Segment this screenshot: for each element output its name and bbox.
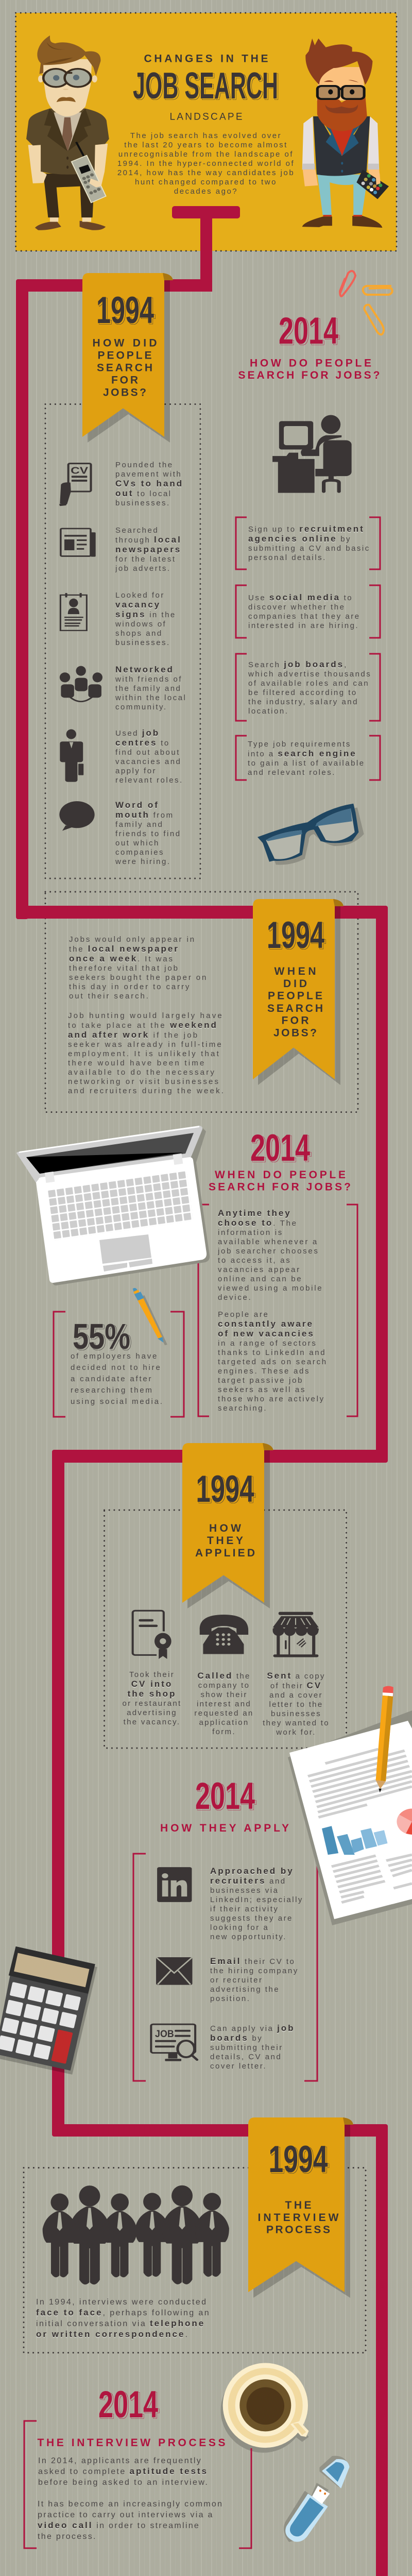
heading: the interview process: THE INTERVIEW PROCESS (37, 2437, 226, 2449)
text: sent a copy: work for. (276, 1728, 316, 1737)
ribbon: 1994 when did people search: FOR (281, 1015, 309, 1026)
ribbon: 1994 when did people search: SEARCH (267, 1003, 323, 1014)
text: job centres: find out about (115, 748, 180, 757)
text: approached by recruiters: if their activity (210, 1905, 279, 1913)
text: pounded the pavement: businesses. (115, 499, 170, 507)
text: video call: practice to carry out interviews via a (38, 2511, 214, 2519)
text: word of mouth: out which (115, 839, 160, 848)
text: networked: within the local (115, 693, 186, 702)
stat card: 55 percent: decided not to hire (71, 1363, 162, 1372)
panel: title header (15, 13, 397, 251)
text: face to face: face to face, perhaps following an (36, 2308, 210, 2317)
text: anytime they choose: viewed using a mobile (218, 1284, 323, 1293)
text: 1994 local newspaper (69, 935, 244, 1002)
icon: vacancy sign (60, 593, 87, 631)
text: 1994 weekend and after work (68, 1011, 246, 1097)
ribbon: 1994 when did people search (253, 899, 344, 1085)
text: called the company: interest and (197, 1700, 251, 1708)
text: anytime they choose: job searcher chooses (218, 1247, 319, 1256)
icon: job board monitor: JOB (155, 2028, 174, 2039)
card: search engine (236, 736, 380, 780)
year: 2014: 2014 (98, 2384, 158, 2426)
text: 1994 weekend and after work: and recruiters during the week. (68, 1087, 225, 1095)
text: video call: video call in order to streamline (38, 2520, 200, 2530)
text: pounded the pavement: pavement with (115, 470, 182, 479)
text: networked: community. (115, 703, 167, 711)
text: vacancy signs: shops and (115, 629, 163, 638)
text: anytime they choose: online and can be (218, 1275, 302, 1283)
text: constantly aware: engines. These ads (218, 1367, 310, 1376)
heading: how do people search for jobs: HOW DO PEOPLE (250, 358, 371, 369)
text: anytime they choose: choose to. The (218, 1218, 298, 1228)
text: called the company: show their (200, 1690, 248, 1699)
panel: 2014 interview process (24, 2384, 251, 2548)
text: 1994 local newspaper: once a week. It was (69, 954, 174, 963)
illustration: pencil (376, 1686, 393, 1792)
text: 1994 weekend and after work: seeker was already in full-time (68, 1040, 223, 1049)
text: word of mouth: companies (115, 848, 164, 857)
ribbon: 1994 how they applied: 1994 (196, 1468, 254, 1510)
stat card: 55 percent: researching them (71, 1386, 153, 1395)
dotted panel frames (24, 404, 386, 2576)
panel: 2014 how do people search: SEARCH FOR JOBS? (238, 369, 380, 381)
illustration: blue glasses (258, 804, 364, 865)
ribbon: 1994 when did people search: 1994 (267, 914, 324, 956)
text: aptitude tests (38, 2455, 249, 2489)
text: job centres: vacancies and (115, 757, 181, 766)
text: sent a copy: and a cover (269, 1691, 323, 1700)
text: 1994 local newspaper: therefore vital that job (69, 964, 179, 973)
text: approached by recruiters: new opportunity. (210, 1933, 287, 1941)
stat card: 55 percent (54, 1312, 184, 1417)
ribbon: 1994 when did people search: PEOPLE (268, 990, 322, 1002)
intro text: decades ago? (174, 187, 238, 196)
text: approached by recruiters: LinkedIn; especially (210, 1895, 303, 1904)
card: search engine: into a search engine (248, 749, 357, 758)
icon: businessman (60, 729, 83, 782)
year: 2014: 2014 (279, 310, 338, 352)
text: face to face (36, 2297, 247, 2342)
text: called the company: requested an (194, 1709, 254, 1718)
bracket frame (133, 1854, 317, 2081)
ribbon: 1994 when did people search: JOBS? (273, 1027, 317, 1039)
card: recruitment agencies (236, 517, 380, 569)
card: job boards (236, 654, 380, 721)
ribbon: 1994 when did people search: DID (283, 978, 307, 990)
illustration: 2014 bearded job seeker with smartphone (302, 39, 389, 228)
icon: shop front (273, 1612, 319, 1657)
year: 2014: 2014 (250, 1127, 310, 1169)
text: 1994 local newspaper: Jobs would only appear in (69, 935, 196, 944)
stat card: 55 percent: a candidate after (71, 1375, 152, 1383)
ribbon: 1994 how did people search: FOR (111, 374, 138, 386)
card: job boards: which advertise thousands (248, 670, 371, 679)
intro text: the last 20 years to become almost (124, 141, 288, 149)
icon: person at computer (272, 415, 352, 493)
ribbon: 1994 the interview process: THE (285, 2199, 311, 2211)
stat card: 55 percent: using social media. (71, 1397, 164, 1406)
text: email CV: position. (210, 1994, 250, 2003)
text: constantly aware: those who are actively (218, 1395, 325, 1403)
text: video call: It has become an increasingly common (38, 2500, 223, 2509)
text: word of mouth (115, 801, 200, 868)
text: job centres: apply for (115, 767, 157, 775)
illustration: calculator (0, 1946, 97, 2075)
panel: 1994 interview process items (36, 2185, 247, 2342)
text: job boards: boards by (210, 2033, 263, 2043)
panel: 1994 how did people search items (59, 461, 200, 868)
ribbon: 1994 the interview process: PROCESS (266, 2224, 330, 2236)
ribbon: 1994 how they applied: HOW (209, 1522, 241, 1534)
ribbon: 1994 how did people search: JOBS? (103, 386, 146, 398)
text: sent a copy: of their CV (270, 1681, 322, 1690)
ribbon: 1994 how did people search: HOW DID (93, 337, 157, 349)
text: aptitude tests: In 2014, applicants are frequently (38, 2456, 202, 2465)
text: word of mouth: were hiring. (115, 857, 171, 866)
text: vacancy signs: vacancy (115, 600, 161, 609)
text: job boards (210, 2024, 316, 2072)
text: called the company: application (199, 1718, 249, 1727)
text: email CV (210, 1957, 316, 2005)
text: anytime they choose: device. (218, 1293, 252, 1302)
icon: row of business people (43, 2185, 229, 2284)
text: vacancy signs (115, 591, 198, 649)
bracket frame (198, 1205, 357, 1416)
text: CV into the shop: the vacancy. (124, 1718, 180, 1726)
panel: 1994 how they applied items (111, 1611, 337, 1738)
decoration: paper clips (340, 271, 392, 334)
card: social media: discover whether the (248, 603, 345, 612)
text: 1994 local newspaper: the local newspaper (69, 944, 179, 954)
heading: when do people search for jobs: WHEN DO PEOPLE (215, 1169, 346, 1181)
text: called the company: company to (198, 1681, 250, 1690)
text: constantly aware: constantly aware (218, 1319, 314, 1329)
ribbon: 1994 how did people search: SEARCH (97, 362, 152, 374)
card: job boards: be filtered according to (248, 688, 357, 697)
text: constantly aware: of new vacancies (218, 1329, 315, 1338)
text: searched newspapers: newspapers (115, 545, 181, 554)
ribbon: 1994 the interview process: INTERVIEW (258, 2212, 339, 2224)
text: aptitude tests: asked to complete aptitude tests (38, 2466, 208, 2476)
text: sent a copy (255, 1671, 337, 1738)
card: job boards: of available roles and can (248, 679, 369, 688)
text: 1994 local newspaper: out their search. (69, 992, 150, 1001)
heading: how they apply: HOW THEY APPLY (160, 1822, 289, 1834)
text: searched newspapers: Searched (115, 526, 159, 535)
ribbon: 1994 when did people search: WHEN (274, 965, 316, 977)
text: anytime they choose: to access it, as (218, 1256, 291, 1265)
icon: CV in hand (59, 464, 91, 506)
text: email CV: the hiring company (210, 1967, 299, 1975)
icon: networking people (60, 666, 102, 702)
text: face to face: initial conversation via telephone (36, 2318, 205, 2328)
illustration: laptop (16, 1126, 210, 1285)
text: approached by recruiters (210, 1867, 316, 1943)
ribbon: 1994 how did people search (82, 273, 173, 443)
text: word of mouth: mouth from (115, 810, 174, 820)
text: sent a copy: businesses (271, 1709, 321, 1718)
text: word of mouth: family and (115, 820, 163, 829)
text: job centres: centres to (115, 738, 170, 748)
text: constantly aware: thanks to LinkedIn and (218, 1348, 326, 1357)
text: anytime they choose: information is (218, 1228, 283, 1237)
intro text: 1994. In the hyper-connected world of (117, 159, 295, 168)
ribbon: 1994 how did people search: PEOPLE (98, 349, 151, 361)
text: 1994 weekend and after work: employment. It is unlikely that (68, 1049, 220, 1058)
card: search engine: and relevant roles. (248, 768, 336, 777)
text: 1994 local newspaper: seekers bought the paper on (69, 973, 208, 982)
icon: speech bubble (59, 801, 95, 831)
card: recruitment agencies: submitting a CV and basic (248, 544, 370, 553)
text: constantly aware: People are (218, 1310, 269, 1319)
text: job centres (115, 728, 200, 786)
text: vacancy signs: businesses. (115, 638, 170, 647)
heading: Landscape: LANDSCAPE (170, 112, 242, 123)
text: 1994 weekend and after work: and after work if the job (68, 1030, 199, 1040)
text: constantly aware: searching. (218, 1404, 267, 1413)
heading: Job Search: JOB SEARCH (133, 65, 278, 107)
card: recruitment agencies: personal details. (248, 553, 327, 562)
panel: 2014 when do people search (198, 1127, 357, 1416)
text: job boards: cover letter. (210, 2062, 267, 2071)
icon: job board monitor (151, 2024, 197, 2061)
stat card: 55 percent: of employers have (71, 1352, 158, 1361)
text: approached by recruiters: businesses via (210, 1886, 279, 1895)
panel: 2014 how do people search (236, 310, 380, 780)
text: networked: with friends of (115, 675, 182, 684)
text: email CV: or recruiter (210, 1976, 263, 1985)
card: social media: companies that they are (248, 612, 360, 621)
text: aptitude tests: before being asked to an interview. (38, 2478, 209, 2487)
text: 1994 weekend and after work: available to do the necessary (68, 1068, 216, 1077)
intro text: 2014, how has the way candidates job (117, 168, 295, 177)
icon: LinkedIn (157, 1867, 192, 1902)
card: social media (236, 585, 380, 638)
illustration: document with charts and pencil (288, 1686, 412, 1925)
text: video call: the process. (38, 2532, 97, 2541)
text: sent a copy: letter to the (269, 1700, 323, 1709)
text: anytime they choose (218, 1209, 354, 1303)
illustration: pen (133, 1288, 166, 1345)
text: pounded the pavement: Pounded the (115, 461, 174, 469)
text: vacancy signs: signs in the (115, 609, 176, 619)
text: CV into the shop: CV into (131, 1679, 173, 1689)
text: CV into the shop: the shop (128, 1689, 176, 1699)
ribbon: 1994 how did people search: 1994 (96, 290, 154, 331)
bracket frame (24, 2421, 251, 2548)
text: constantly aware: seekers as well as (218, 1385, 306, 1394)
ribbon: 1994 how they applied: APPLIED (195, 1547, 255, 1559)
text: anytime they choose: vacancies appear (218, 1265, 301, 1274)
panel: 2014 how they apply (133, 1775, 317, 2081)
text: CV into the shop (111, 1670, 193, 1728)
text: constantly aware (218, 1310, 354, 1414)
text: searched newspapers: for the latest (115, 555, 176, 564)
intro text: hunt changed compared to two (135, 178, 277, 187)
text: face to face: or written correspondence. (36, 2329, 188, 2339)
card: search engine: Type job requirements (248, 740, 351, 749)
text: sent a copy: they wanted to (263, 1719, 330, 1727)
text: anytime they choose: available whenever a (218, 1238, 318, 1246)
text: searched newspapers: through local (115, 535, 182, 545)
text: constantly aware: in a range of sectors (218, 1339, 317, 1348)
card: job boards: location. (248, 707, 288, 716)
text: approached by recruiters: recruiters and (210, 1876, 286, 1886)
text: CV into the shop: advertising (127, 1708, 177, 1717)
text: constantly aware: target passive job (218, 1376, 303, 1385)
ribbon: 1994 how they applied: THEY (207, 1535, 243, 1547)
text: CV into the shop: or restaurant (123, 1699, 181, 1708)
icon: CV in hand: CV (71, 465, 89, 476)
icon: email envelope (156, 1957, 192, 1985)
card: social media: interested in are hiring. (248, 621, 359, 630)
text: called the company (183, 1671, 265, 1738)
text: 1994 weekend and after work: networking or visit businesses (68, 1077, 220, 1086)
text: vacancy signs: Looked for (115, 591, 165, 600)
text: job boards: details, CV and (210, 2053, 282, 2061)
text: constantly aware: targeted ads on search (218, 1358, 328, 1366)
ribbon: 1994 how they applied (182, 1443, 273, 1608)
illustration: 1994 job seeker with brick phone (26, 36, 109, 230)
text: word of mouth: friends to find (115, 829, 181, 838)
illustration: USB stick (284, 2456, 350, 2542)
text: job centres: relevant roles. (115, 776, 183, 785)
illustration: coffee cup (221, 2363, 308, 2453)
text: pounded the pavement (115, 461, 198, 509)
text: pounded the pavement: CVs to hand (115, 479, 183, 488)
text: 1994 weekend and after work: Job hunting would largely have (68, 1011, 224, 1020)
intro text: The job search has evolved over (130, 131, 282, 140)
intro text (113, 131, 299, 198)
ribbon: 1994 the interview process: 1994 (269, 2139, 328, 2180)
year: 2014: 2014 (195, 1775, 255, 1817)
ribbon: 1994 the interview process (248, 2117, 353, 2298)
heading: Changes in the: CHANGES IN THE (144, 53, 268, 65)
text: email CV: advertising the (210, 1985, 280, 1994)
text: video call (38, 2499, 249, 2544)
text: networked (115, 665, 200, 714)
card: search engine: to gain a list of available (248, 759, 365, 768)
text: vacancy signs: windows of (115, 620, 166, 629)
panel: 2014 when do people search: SEARCH FOR JOBS? (209, 1181, 351, 1193)
icon: telephone (200, 1615, 248, 1654)
icon: newspaper (61, 529, 96, 557)
text: job boards: submitting their (210, 2043, 283, 2052)
card: recruitment agencies: agencies online by (248, 534, 351, 544)
text: searched newspapers: job adverts. (115, 564, 171, 573)
text: searched newspapers (115, 526, 198, 574)
text: approached by recruiters: looking for a (210, 1923, 269, 1932)
text: CV into the shop: Took their (129, 1670, 175, 1679)
text: 1994 weekend and after work: there would have been time (68, 1059, 206, 1067)
icon: certificate document (133, 1611, 171, 1659)
text: 1994 weekend and after work: to take place at the weekend (68, 1020, 218, 1030)
text: pounded the pavement: out to local (115, 488, 172, 498)
text: 1994 local newspaper: this day in order to carry (69, 982, 191, 991)
text: approached by recruiters: suggests they are (210, 1914, 293, 1923)
stat card: 55 percent: 55% (73, 1316, 130, 1357)
intro text: unrecognisable from the landscape of (118, 150, 294, 159)
text: face to face: In 1994, interviews were conducted (36, 2298, 207, 2307)
card: job boards: the industry, salary and (248, 698, 358, 706)
text: networked: the family and (115, 684, 181, 693)
text: called the company: form. (212, 1727, 236, 1736)
